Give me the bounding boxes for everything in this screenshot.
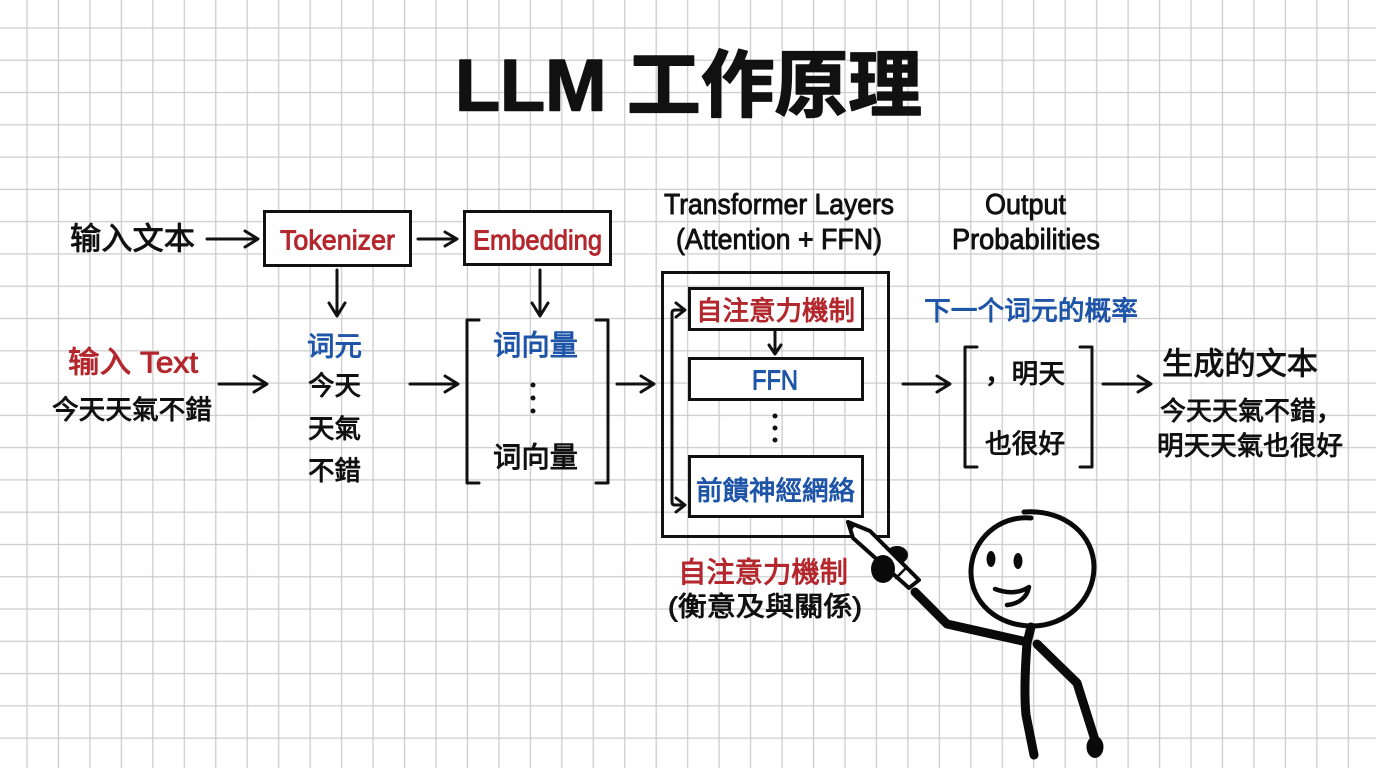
arrow: vectors to transformer: [617, 376, 654, 392]
matrix: word vectors: [467, 320, 608, 483]
text block: input text example: [52, 346, 212, 425]
stick figure with pen: [846, 512, 1104, 758]
box: tokenizer: Tokenizer: [280, 224, 395, 256]
matrix: candidate tokens: [965, 347, 1092, 467]
arrow: attention to ffn: [769, 331, 781, 354]
text block: generated text: 生成的文本: [1162, 346, 1318, 382]
caption: self attention: 自注意力機制: [678, 556, 848, 588]
box: self attention: 自注意力機制: [696, 296, 855, 326]
matrix: candidate tokens: 也很好: [985, 429, 1065, 459]
box: self attention: [690, 288, 862, 330]
arrow: output to generated text: [1103, 376, 1151, 392]
caption: self attention: (衡意及與關係): [668, 592, 862, 622]
arrow: tokenizer to embedding: [418, 232, 457, 246]
box: ffn: [690, 358, 862, 400]
text block: generated text: [1157, 346, 1343, 461]
pen tip: [846, 520, 856, 531]
pen band: [896, 569, 905, 578]
heading: transformer layers: (Attention + FFN): [676, 224, 882, 256]
body: [1025, 627, 1034, 755]
heading: output probabilities: Probabilities: [952, 224, 1100, 256]
arrow: residual connection: [672, 303, 685, 512]
arrow: transformer to output: [903, 376, 950, 392]
caption: self attention: [668, 556, 862, 622]
box: feed forward network: [690, 456, 862, 516]
arrow: tokens to vectors: [410, 376, 458, 392]
panel: transformer stack: [662, 272, 888, 536]
head: [971, 512, 1094, 626]
text block: tokens: 今天: [308, 371, 361, 401]
arrow: input to tokens: [219, 376, 267, 392]
face: [986, 551, 1029, 605]
text block: input text example: 今天天氣不錯: [52, 395, 212, 425]
pointing arm: [915, 592, 1027, 642]
label: next token probability: 下一个词元的概率: [924, 296, 1138, 326]
text block: input text example: 输入 Text: [68, 346, 199, 380]
other arm: [1037, 644, 1095, 740]
box: embedding: [464, 212, 610, 264]
text block: generated text: 今天天氣不錯，: [1160, 396, 1342, 426]
text block: tokens: 天氣: [308, 414, 361, 444]
heading: output probabilities: [952, 189, 1100, 256]
front fingers: [871, 555, 895, 583]
dots: more layers: [772, 414, 778, 442]
box: ffn: FFN: [752, 364, 798, 396]
matrix: word vectors: 词向量: [493, 442, 578, 474]
matrix: word vectors: 词向量: [493, 330, 578, 362]
text block: generated text: 明天天氣也很好: [1157, 431, 1343, 461]
text block: tokens: 不錯: [308, 456, 361, 486]
hand: [1086, 736, 1104, 758]
text block: tokens: 词元: [307, 330, 362, 362]
title: LLM 工作原理: [455, 46, 922, 126]
heading: transformer layers: Transformer Layers: [664, 189, 894, 221]
box: tokenizer: [264, 212, 410, 266]
heading: output probabilities: Output: [985, 189, 1066, 221]
text block: tokens: [307, 330, 362, 486]
arrow: tokenizer down: [329, 270, 345, 316]
arrow: input to tokenizer: [207, 231, 258, 247]
back fingers: [886, 546, 908, 564]
box: feed forward network: 前饋神經網絡: [696, 476, 855, 506]
box: embedding: Embedding: [473, 224, 602, 256]
matrix: candidate tokens: ，明天: [985, 359, 1065, 389]
arrow: embedding down: [532, 270, 548, 316]
pen: [848, 522, 919, 588]
label: input text: 输入文本: [70, 222, 195, 256]
heading: transformer layers: [664, 189, 894, 256]
